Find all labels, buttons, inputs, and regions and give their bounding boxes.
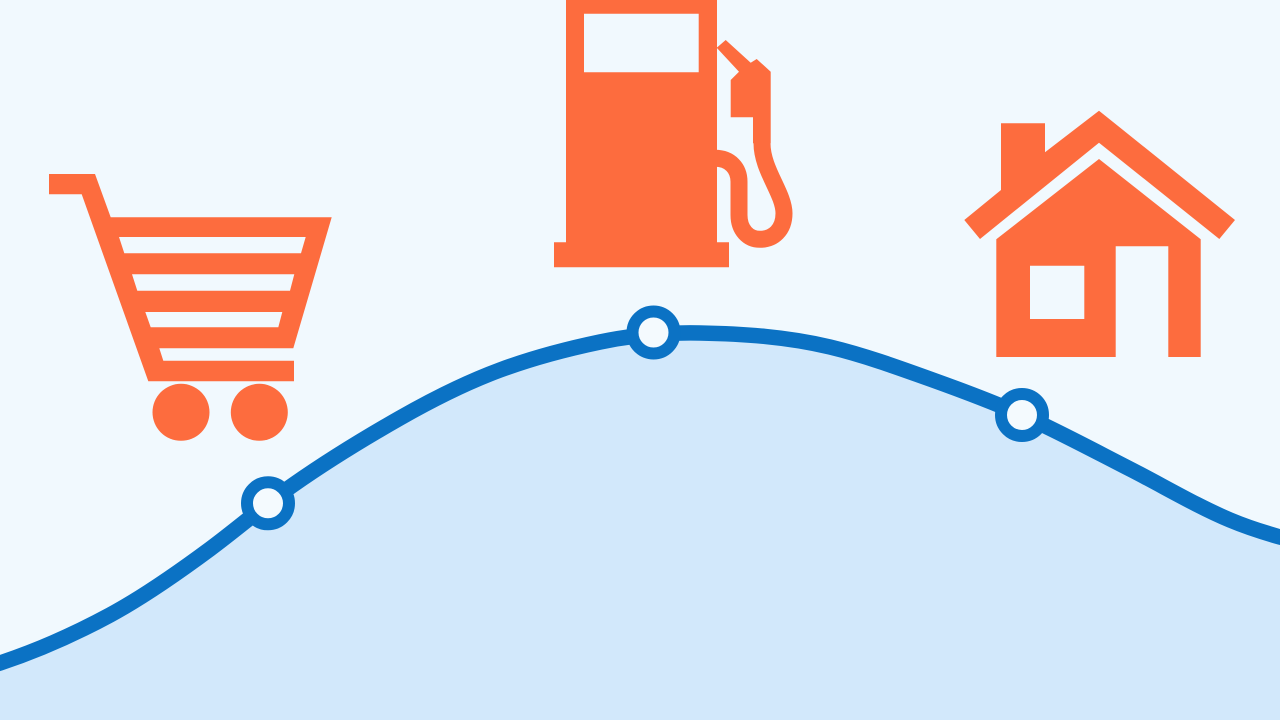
icon: house [964,111,1235,357]
area under the price curve [0,333,1280,720]
icon: fuel pump [554,0,784,267]
price trend line [0,333,1280,665]
icon: shopping cart [49,174,332,441]
marker: fuel point [632,312,674,354]
marker: groceries point [247,482,289,524]
marker: housing point [1001,394,1043,436]
